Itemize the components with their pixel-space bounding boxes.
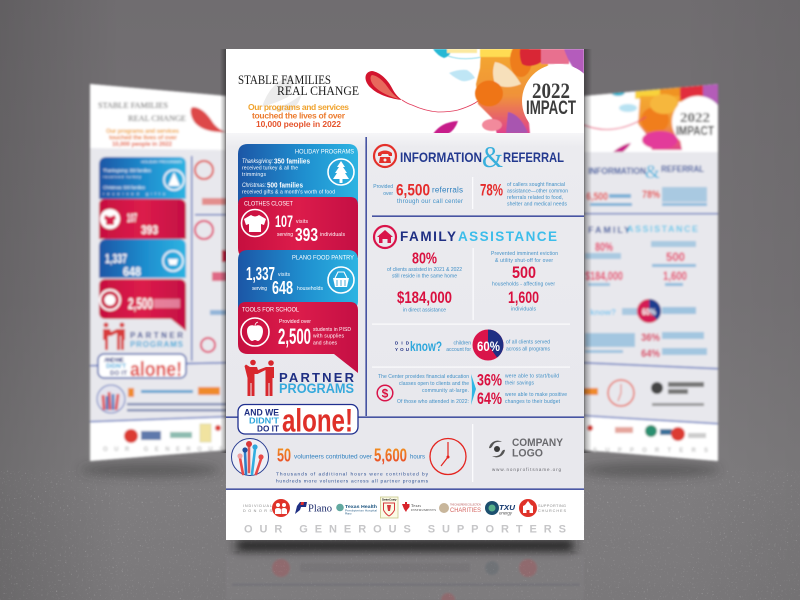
- flower artwork: [432, 49, 584, 133]
- texas instruments logo: [402, 502, 436, 512]
- card: tools for school: TOOLS FOR SCHOOL: [242, 306, 299, 314]
- panel: did you know: YOU: [395, 347, 409, 352]
- right background flyer: REFERRAL: [661, 164, 704, 174]
- card: holiday programs: Christmas:: [242, 183, 266, 189]
- icon: christmas tree: [328, 159, 354, 185]
- our generous supporters heading: OUR GENEROUS SUPPORTERS: [244, 524, 566, 536]
- left background flyer: touched the lives of over: [109, 136, 178, 142]
- stat: $184,000: [397, 288, 452, 314]
- financial education description: classes open to clients and the: [399, 381, 469, 387]
- panel: volunteers: 5,600: [374, 446, 407, 466]
- stat: 78% callers: of callers sought financial: [507, 182, 565, 188]
- card: clothes closet: visits: [296, 219, 308, 225]
- financial education description: Of those who attended in 2022:: [397, 399, 469, 405]
- impact badge circle: [522, 64, 584, 124]
- card: tools for school: [238, 302, 358, 373]
- white divider: [472, 177, 473, 209]
- stat: 80%: [387, 250, 462, 280]
- and we didn't do it alone banner: DIDN'T: [249, 416, 280, 426]
- right background flyer: 64%: [641, 348, 660, 360]
- left background flyer: received gifts: [103, 191, 165, 196]
- partner programs label: PARTNER: [279, 370, 355, 385]
- panel: volunteers: volunteers contributed over: [294, 454, 373, 460]
- texas health logo: Presbyterian Hospital: [345, 508, 377, 512]
- stat: 80%: still reside in the same home: [392, 274, 457, 280]
- left background flyer: DIDN'T: [106, 364, 126, 370]
- partner programs label: PROGRAMS: [279, 381, 354, 396]
- and we didn't do it alone banner: DO IT: [257, 424, 280, 434]
- supporting churches: [519, 499, 566, 517]
- divider lines: [226, 216, 584, 490]
- icon: t-shirt: [242, 210, 268, 236]
- individual donors: INDIVIDUAL: [243, 504, 272, 508]
- texas health logo: Plano: [345, 512, 352, 516]
- left background flyer: 10,000 people in 2022: [112, 142, 173, 148]
- 2022 impact heading: IMPACT: [526, 97, 576, 119]
- heading: INFORMATION: [400, 149, 482, 165]
- stat: 500 households: 500: [512, 263, 536, 282]
- panel: did you know: know?: [410, 338, 442, 354]
- right background flyer: SUPPORTERS: [593, 448, 708, 454]
- stat: 78% callers: [480, 180, 568, 208]
- company logo: LOGO: [512, 448, 543, 460]
- stat: 6,500 referrals: through our call center: [397, 199, 463, 205]
- charities logo: CHARITIES: [450, 508, 481, 514]
- white divider: [472, 424, 473, 482]
- panel: light grey body: [226, 133, 584, 417]
- stat: 78% callers: assistance—other common: [507, 188, 568, 194]
- left background flyer: 393: [141, 223, 158, 237]
- stat: 64%: were able to make positive: [505, 392, 567, 398]
- right background flyer: INFORMATION: [588, 166, 646, 176]
- heading: ASSISTANCE: [458, 229, 557, 244]
- left background flyer: 1,337: [105, 251, 127, 266]
- left background flyer: 2,500: [128, 296, 153, 313]
- stat: 36%: [477, 370, 559, 390]
- stat: 6,500 referrals: over: [383, 191, 393, 197]
- watermark leaf: [262, 75, 302, 112]
- heading: [400, 229, 557, 244]
- heading: &: [482, 139, 503, 174]
- stat: 500 households: [491, 251, 558, 288]
- panel: header: [238, 49, 584, 133]
- card: clothes closet: 393: [295, 225, 318, 245]
- left background flyer: OUR GENEROUS: [103, 447, 223, 453]
- txu energy logo: TXU: [499, 503, 516, 512]
- card: plano food pantry: serving: [252, 286, 267, 292]
- right background flyer: IMPACT: [676, 123, 714, 138]
- card: holiday programs: 350 families: [274, 158, 310, 166]
- card: tools for school: 2,500: [278, 324, 311, 349]
- left background flyer: received turkey: [103, 174, 141, 179]
- plano logo: Plano: [308, 504, 332, 514]
- card: holiday programs: trimmings: [242, 172, 266, 178]
- panel: volunteers: [232, 438, 466, 484]
- panel: volunteers: 50: [277, 446, 291, 466]
- stat: 500 households: Prevented imminent eviction: [491, 251, 558, 257]
- texas instruments logo: Texas: [411, 504, 422, 508]
- supporting churches: SUPPORTING: [538, 504, 566, 508]
- left background flyer: PARTNER: [130, 331, 183, 340]
- icon: basket: [328, 267, 354, 293]
- card: plano food pantry: visits: [278, 272, 290, 278]
- texas instruments logo: INSTRUMENTS: [411, 508, 436, 512]
- left background flyer: STABLE FAMILIES: [98, 101, 168, 110]
- left background flyer: 648: [123, 264, 141, 279]
- stat: 1,600 individuals: [508, 288, 539, 312]
- county badge: [380, 497, 398, 518]
- stat: 64%: changes to their budget: [505, 399, 561, 405]
- and we didn't do it alone banner: AND WE: [244, 408, 279, 418]
- left background flyer: REAL CHANGE: [128, 114, 186, 123]
- icon: apple: [241, 318, 269, 346]
- icon: clock: [430, 438, 466, 474]
- icon: raised hands: [232, 438, 268, 476]
- left background flyer: 107: [127, 211, 137, 225]
- panel: did you know: across all programs: [506, 346, 550, 352]
- icon: house: [374, 226, 396, 248]
- left background flyer: HOLIDAY PROGRAMS: [141, 159, 182, 164]
- stat: 500 households: households - affecting over: [492, 282, 555, 288]
- card: holiday programs: received turkey & all the: [242, 166, 298, 172]
- panel: supporters footer: [243, 497, 566, 536]
- company logo: www.nonprofitsname.org: [492, 467, 561, 472]
- card: clothes closet: serving: [277, 232, 293, 238]
- panel: volunteers: hundreds more volunteers across all partner programs: [276, 478, 429, 484]
- texas health logo: [336, 504, 377, 516]
- stat: 6,500 referrals: [373, 180, 463, 205]
- financial education description: [378, 374, 469, 405]
- left background flyer: [90, 84, 226, 461]
- right background flyer: FAMILY: [588, 225, 630, 235]
- panel: did you know: account for: [446, 347, 471, 353]
- icon: logo swirl: [489, 441, 505, 457]
- 2022 impact heading: 2022: [532, 78, 570, 103]
- stat: 64%: 64%: [477, 389, 502, 408]
- stat: 1,600 individuals: individuals: [511, 306, 536, 312]
- and we didn't do it alone banner: [238, 402, 358, 438]
- card: plano food pantry: [238, 250, 358, 310]
- card: holiday programs: [238, 144, 358, 204]
- arrow: [471, 374, 476, 405]
- card: plano food pantry: 1,337: [246, 264, 275, 284]
- left background flyer: alone!: [130, 359, 182, 381]
- subtitle: touched the lives of over: [252, 110, 346, 120]
- subtitle: Our programs and services: [248, 102, 349, 112]
- card: tools for school: students in PISD: [313, 327, 351, 333]
- panel: family assistance: [374, 226, 558, 320]
- card: holiday programs: Thanksgiving:: [242, 159, 273, 165]
- title: STABLE FAMILIES: [238, 73, 331, 87]
- main poster: [226, 43, 596, 540]
- right background flyer: 500: [666, 250, 685, 264]
- 2022 impact heading: [526, 78, 576, 119]
- vertical divider: [366, 137, 367, 416]
- stat: 500 households: & utility shut-off for over: [495, 258, 553, 264]
- right background flyer: 36%: [641, 332, 660, 344]
- left background flyer: Christmas: 500 families: [103, 185, 146, 190]
- card: tools for school: and shoes: [313, 340, 338, 346]
- stat: 78% callers: referrals related to food,: [507, 195, 563, 201]
- texas health logo: Texas Health: [345, 504, 377, 509]
- right background flyer: know?: [590, 308, 616, 317]
- stat: 80%: 80%: [412, 250, 437, 268]
- icon: dollar: $: [382, 386, 389, 400]
- left background flyer: Thanksgiving: 350 families: [103, 168, 152, 173]
- stat: 1,600 individuals: 1,600: [508, 288, 539, 307]
- stat: 36%: were able to start/build: [505, 374, 559, 380]
- charities logo: THE CHILDREN'S COLLECTION: [450, 502, 481, 506]
- plano logo: [295, 502, 332, 514]
- stat: 78% callers: shelter and medical needs: [507, 202, 568, 208]
- panel: left programs column: [238, 144, 358, 396]
- right background flyer: 60%: [642, 307, 656, 317]
- stat: $184,000: $184,000: [397, 288, 452, 307]
- stat: 6,500 referrals: 6,500: [396, 180, 430, 200]
- stat: $184,000: in direct assistance: [403, 308, 446, 314]
- individual donors: DONORS: [243, 509, 272, 513]
- right background flyer: 6,500: [586, 191, 608, 203]
- card: clothes closet: [238, 197, 358, 258]
- card: plano food pantry: households: [297, 286, 324, 292]
- individual donors: [243, 499, 290, 517]
- chart: 60% pie: 60%: [477, 338, 500, 354]
- card: plano food pantry: 648: [272, 278, 293, 298]
- stat: 36%: their savings: [505, 380, 534, 386]
- icon: partners shaking hands: [244, 360, 274, 396]
- panel: information and referral: [373, 139, 568, 209]
- left background flyer: DO IT: [110, 371, 127, 377]
- right background flyer: ASSISTANCE: [627, 224, 698, 234]
- card: holiday programs: received gifts & a month's worth of food: [242, 190, 335, 196]
- and we didn't do it alone banner: alone!: [282, 402, 353, 438]
- stat: 36%: 36%: [477, 370, 502, 390]
- company logo: COMPANY: [512, 437, 564, 449]
- card: holiday programs: 500 families: [267, 182, 303, 190]
- icon: dollar: [377, 385, 393, 401]
- supporting churches: CHURCHES: [538, 509, 566, 513]
- floor shadows: [80, 463, 720, 551]
- heading: FAMILY: [400, 229, 456, 244]
- title: REAL CHANGE: [277, 84, 359, 98]
- subtitle: 10,000 people in 2022: [256, 119, 341, 129]
- white divider: [472, 248, 474, 320]
- right background flyer: &: [645, 162, 660, 183]
- stat: 64%: [477, 389, 567, 408]
- card: tools for school: with supplies: [313, 334, 344, 340]
- heading: REFERRAL: [503, 149, 564, 165]
- right background flyer: 1,600: [663, 269, 687, 283]
- card: clothes closet: individuals: [320, 232, 346, 238]
- poster reflection: [226, 555, 584, 600]
- txu energy logo: energy: [499, 510, 513, 516]
- financial education description: community at-large.: [422, 388, 469, 394]
- card: tools for school: Provided over: [279, 319, 311, 325]
- panel: did you know: of all clients served: [506, 340, 550, 346]
- left background flyer: Our programs and services: [106, 129, 180, 135]
- panel: did you know: children: [453, 340, 471, 346]
- stat: 80%: of clients assisted in 2021 & 2022: [387, 267, 462, 273]
- chart: 60% pie: [472, 330, 504, 360]
- charities logo: [439, 502, 481, 514]
- panel: did you know: DID: [395, 340, 410, 346]
- panel: did you know: [395, 330, 550, 360]
- txu energy logo: [485, 501, 516, 516]
- left background flyer: AND WE: [104, 358, 124, 364]
- title: [238, 73, 359, 98]
- financial education description: The Center provides financial education: [378, 374, 469, 380]
- left background flyer: PROGRAMS: [130, 340, 184, 349]
- county badge: Denton County: [382, 498, 397, 502]
- stat: 78% callers: 78%: [480, 180, 503, 200]
- subtitle: [248, 102, 349, 129]
- right background flyer: [584, 84, 724, 461]
- stat: 6,500 referrals: Provided: [373, 184, 393, 190]
- card: plano food pantry: PLANO FOOD PANTRY: [292, 254, 354, 262]
- right background flyer: 80%: [595, 240, 613, 254]
- panel: volunteers: hours: [410, 454, 426, 460]
- white rule lines: [372, 324, 570, 368]
- card: clothes closet: 107: [275, 212, 293, 231]
- red teardrop with swirl: [366, 71, 492, 112]
- company logo: [489, 437, 564, 472]
- shadows cast by main poster on flyers: [220, 49, 592, 453]
- card: holiday programs: HOLIDAY PROGRAMS: [295, 148, 354, 156]
- panel: volunteers background: [226, 417, 584, 489]
- panel: volunteers: Thousands of additional hours were contributed by: [276, 472, 429, 478]
- partner programs label: [279, 370, 355, 396]
- card: clothes closet: CLOTHES CLOSET: [244, 200, 293, 208]
- right background flyer: 78%: [642, 189, 660, 201]
- icon: telephone: [374, 145, 396, 167]
- stat: 6,500 referrals: referrals: [432, 186, 463, 194]
- flower base blob: [476, 49, 548, 134]
- panel: financial education: [377, 370, 567, 408]
- right background flyer: $184,000: [585, 269, 623, 283]
- right background flyer: 2022: [680, 111, 710, 126]
- heading: [400, 139, 564, 174]
